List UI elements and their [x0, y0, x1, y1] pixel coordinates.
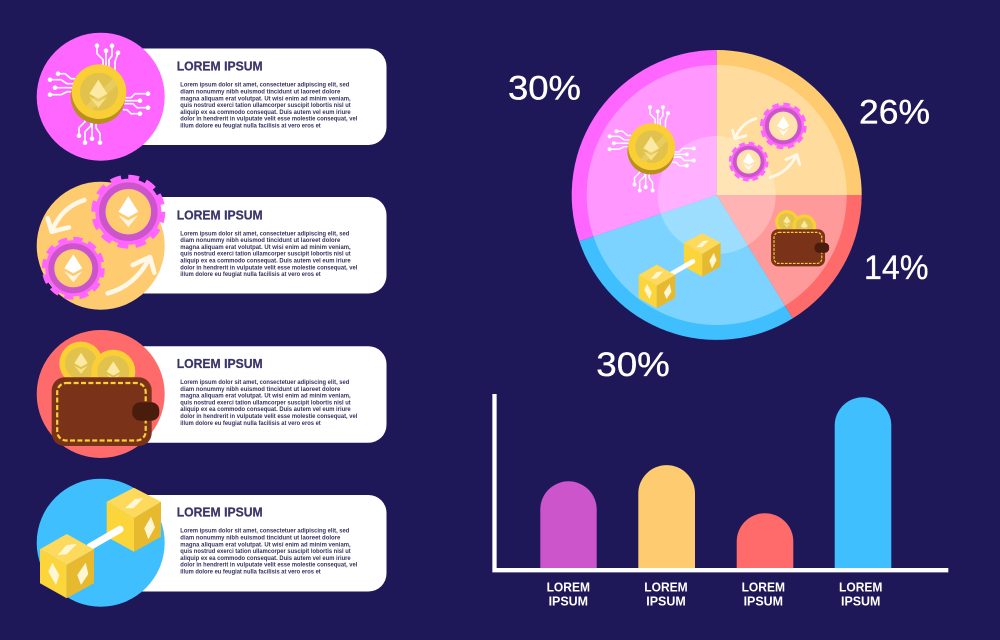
- slice: pink: [572, 50, 717, 241]
- text block 1: dolor in hendrerit in vulputate velit esse molestie consequat, vel: [180, 116, 357, 123]
- bar label 1: LOREM: [547, 580, 590, 594]
- circle 1: [37, 33, 165, 161]
- text block 1: quis nostrud exerci tation ullamcorper suscipit lobortis nisl ut: [180, 102, 351, 109]
- text block 3: diam nonummy nibh euismod tincidunt ut laoreet dolore: [180, 386, 341, 393]
- heading 2: LOREM IPSUM: [177, 208, 263, 222]
- card 4: [100, 495, 386, 592]
- text block 2: aliquip ex ea commodo consequat. Duis autem vel eum iriure: [180, 258, 351, 265]
- bar: red: [737, 513, 793, 568]
- bar label 4: LOREM: [839, 580, 882, 594]
- text block 4: dolor in hendrerit in vulputate velit esse molestie consequat, vel: [180, 562, 357, 569]
- text block 1: diam nonummy nibh euismod tincidunt ut laoreet dolore: [180, 88, 341, 95]
- label: 30% blue slice: 30%: [596, 346, 670, 384]
- text block 1: magna aliquam erat volutpat. Ut wisi enim ad minim veniam,: [180, 95, 351, 102]
- card 2: [100, 197, 386, 294]
- text block 3: Lorem ipsum dolor sit amet, consectetuer adipiscing elit, sed: [180, 379, 349, 386]
- icon: gears and arrows: [44, 177, 163, 298]
- heading 3: LOREM IPSUM: [177, 357, 263, 371]
- text block 4: diam nonummy nibh euismod tincidunt ut laoreet dolore: [180, 535, 341, 542]
- bar label 2: IPSUM: [646, 595, 686, 609]
- pie inner highlight: [587, 65, 847, 325]
- icon: circuit coin: [48, 43, 150, 145]
- text block 3: aliquip ex ea commodo consequat. Duis autem vel eum iriure: [180, 406, 351, 413]
- bar chart: [494, 394, 948, 609]
- text block 1: aliquip ex ea commodo consequat. Duis autem vel eum iriure: [180, 109, 351, 116]
- text block 2: illum dolore eu feugiat nulla facilisis at vero eros et: [180, 271, 321, 278]
- pie icon: gears and arrows: [730, 104, 805, 180]
- bar label 3: LOREM: [742, 580, 785, 594]
- axes: [494, 394, 948, 570]
- label: 14% red slice: 14%: [864, 249, 928, 287]
- slice: blue: [579, 195, 793, 340]
- bar label 2: LOREM: [644, 580, 688, 594]
- circle 2: [37, 182, 165, 310]
- text block 2: Lorem ipsum dolor sit amet, consectetuer adipiscing elit, sed: [180, 230, 349, 237]
- pie icon: linked blocks: [639, 233, 721, 308]
- text block 4: aliquip ex ea commodo consequat. Duis autem vel eum iriure: [180, 555, 351, 562]
- bar label 1: IPSUM: [549, 595, 588, 609]
- card 1: [100, 48, 386, 145]
- circle 4: [37, 479, 165, 607]
- pie centre highlight: [658, 136, 776, 254]
- card 3: [100, 346, 386, 443]
- text block 1: [180, 82, 357, 130]
- bar label 3: [742, 580, 785, 609]
- text block 2: dolor in hendrerit in vulputate velit esse molestie consequat, vel: [180, 264, 357, 271]
- text block 2: quis nostrud exerci tation ullamcorper suscipit lobortis nisl ut: [180, 251, 351, 258]
- bar label 3: IPSUM: [744, 595, 783, 609]
- panel: item 4: [37, 479, 386, 607]
- text block 2: magna aliquam erat volutpat. Ut wisi enim ad minim veniam,: [180, 244, 351, 251]
- label: 30% pink slice: 30%: [508, 70, 581, 108]
- panel: item 1: [37, 33, 386, 161]
- text block 3: dolor in hendrerit in vulputate velit esse molestie consequat, vel: [180, 413, 357, 420]
- text block 4: Lorem ipsum dolor sit amet, consectetuer adipiscing elit, sed: [180, 528, 349, 535]
- text block 1: illum dolore eu feugiat nulla facilisis at vero eros et: [180, 122, 321, 129]
- pie icon: wallet: [771, 210, 829, 266]
- heading 4: LOREM IPSUM: [177, 506, 263, 520]
- icon: wallet with coins: [52, 342, 159, 446]
- bar label 4: IPSUM: [841, 595, 880, 609]
- text block 4: magna aliquam erat volutpat. Ut wisi enim ad minim veniam,: [180, 541, 351, 548]
- heading 1: LOREM IPSUM: [177, 60, 263, 74]
- text block 3: magna aliquam erat volutpat. Ut wisi enim ad minim veniam,: [180, 393, 351, 400]
- bar label 4: [839, 580, 882, 609]
- pie icon: circuit coin: [608, 105, 696, 193]
- text block 2: [180, 230, 357, 278]
- bar label 2: [644, 580, 688, 609]
- text block 4: illum dolore eu feugiat nulla facilisis at vero eros et: [180, 569, 321, 576]
- bar: orange: [638, 465, 695, 568]
- pie chart: [572, 50, 862, 340]
- slice: red: [717, 195, 862, 318]
- bar: blue: [835, 397, 891, 568]
- text block 3: [180, 379, 357, 427]
- text block 4: quis nostrud exerci tation ullamcorper suscipit lobortis nisl ut: [180, 548, 351, 555]
- slice: orange: [717, 50, 862, 195]
- bar: purple: [540, 481, 597, 568]
- label: 26% orange slice: 26%: [859, 94, 930, 132]
- text block 3: quis nostrud exerci tation ullamcorper suscipit lobortis nisl ut: [180, 399, 351, 406]
- panel: item 3: [37, 330, 386, 458]
- bar label 1: [547, 580, 590, 609]
- icon: linked blocks: [40, 488, 161, 598]
- text block 2: diam nonummy nibh euismod tincidunt ut laoreet dolore: [180, 237, 341, 244]
- text block 4: [180, 528, 357, 576]
- circle 3: [37, 330, 165, 458]
- panel: item 2: [37, 177, 386, 310]
- text block 1: Lorem ipsum dolor sit amet, consectetuer adipiscing elit, sed: [180, 82, 349, 89]
- text block 3: illum dolore eu feugiat nulla facilisis at vero eros et: [180, 420, 321, 427]
